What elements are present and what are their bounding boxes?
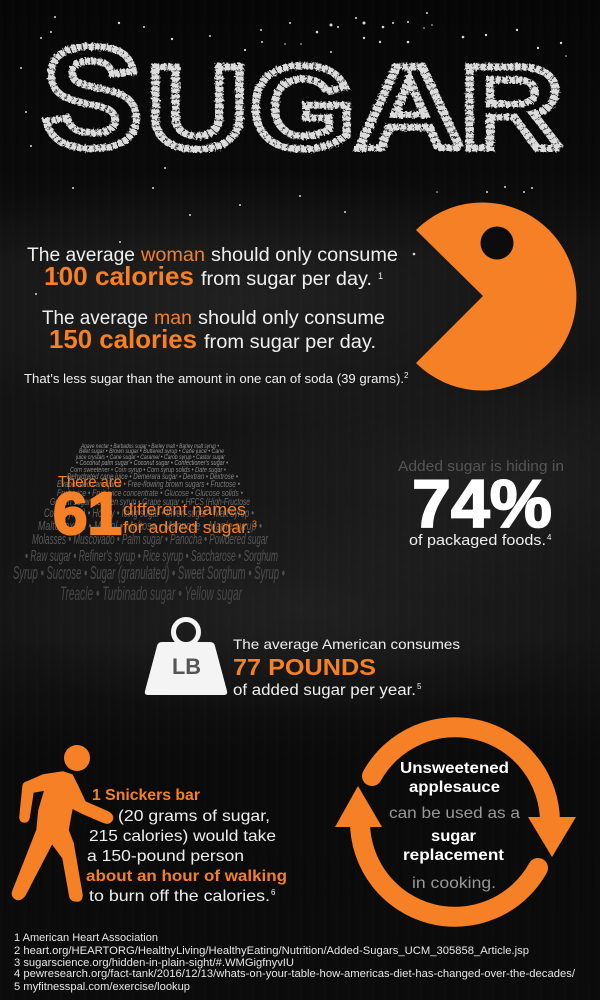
calorie limits text: from sugar per day. [204,332,376,353]
word cloud: names for sugar: Corn sweetener • Corn syrup • Corn syrup solids • Date sugar • [70,465,226,474]
word cloud: names for sugar: Fruit juice • Fruit juice concentrate • Glucose • Glucose solids • [57,488,243,499]
icon: cycle arrows [335,727,576,917]
walking text: 1 Snickers bar [92,787,200,804]
applesauce text: applesauce [409,779,500,796]
icon: LB weight: LB [172,654,201,679]
icon: walking person [12,745,112,901]
title: SUGAR: G [250,42,355,174]
footnotes [14,932,576,993]
word cloud: names for sugar: • Raw sugar • Refiner's syrup • Rice syrup • Saccharose • Sorghum [25,548,278,565]
sugar crystals scattered [20,12,567,295]
stat: 74 percent: of packaged foods. [409,532,546,549]
walking text: (20 grams of sugar, [118,808,270,825]
calorie limits text [24,245,409,386]
walking text: 215 calories) would take [89,828,276,845]
stat: 61 names: for added sugar. [123,518,251,537]
word cloud: names for sugar: Beet sugar • Brown sugar • Buttered syrup • Cane juice • Cane [79,449,225,455]
stat: 74 percent: Added sugar is hiding in [398,458,564,475]
walking text: 6 [271,888,276,897]
calorie limits text: from sugar per day. [201,269,372,290]
walking text: a 150-pound person [87,848,244,865]
stat: 77 pounds: 77 POUNDS [233,654,376,680]
applesauce text: in cooking. [412,875,496,892]
word cloud: names for sugar: Maltodextrin • Maltol • Maltose • Mannose • Maple syrup • [38,518,262,533]
calorie limits text: 100 calories [44,261,194,291]
stat: 77 pounds: The average American consumes [233,636,460,652]
stat: 74 percent: 74% [412,466,552,542]
word cloud: names for sugar: Dehydrated cane juice • Demerara sugar • Dextran • Dextrose • [67,472,238,481]
word cloud: names for sugar: Evaporated cane juice • Free-flowing brown sugars • Fructose • [57,479,240,489]
calorie limits text: woman [140,245,205,266]
applesauce text: can be used as a [389,805,520,822]
word cloud: names for sugar: Molasses • Muscovado • Palm sugar • Panocha • Powdered sugar [32,532,269,548]
calorie limits text: The average [42,308,148,329]
word cloud: names for sugar: Treacle • Turbinado sugar • Yellow sugar [60,584,242,605]
walking text [86,787,287,905]
calorie limits text: should only consume [198,308,385,329]
applesauce text: replacement [403,847,505,864]
stat: 77 pounds: of added sugar per year. [233,682,416,699]
title: SUGAR: R [460,42,563,174]
word cloud: names for sugar [13,444,285,605]
walking text: about an hour of walking [86,868,287,885]
applesauce text: sugar [431,828,476,845]
stat: 74 percent: 4 [547,533,552,542]
title: SUGAR: S [42,17,142,178]
stat: 61 names: There are [58,474,122,491]
footnotes: 4 pewresearch.org/fact-tank/2016/12/13/whats-on-your-table-how-americas-diet-has-changed-over-the-decades/ [14,968,576,980]
stat: 77 pounds [233,636,460,699]
icon: pac-man [416,202,576,390]
footnotes: 1 American Heart Association [14,932,158,944]
stat: 61 names: 61 [53,481,122,547]
title: SUGAR: A [355,42,464,174]
word cloud: names for sugar: Corn Syrup) • Honey • Icing sugar • Invert sugar • Malt syrup • [44,508,254,520]
calorie limits text: 1 [378,271,383,281]
word cloud: names for sugar: Golden sugar • Golden syrup • Grape sugar • HFCS (High-Fructose [50,496,250,508]
footnotes: 5 myfitnesspal.com/exercise/lookup [14,981,190,993]
word cloud: names for sugar: juice crystals • Cane sugar • Caramel • Carob syrup • Castor sugar [75,454,226,461]
calorie limits text: 150 calories [49,324,197,354]
stat: 77 pounds: 5 [417,682,422,691]
footnotes: 2 heart.org/HEARTORG/HealthyLiving/HealthyEating/Nutrition/Added-Sugars_UCM_305858_Article.jsp [14,945,529,957]
stat: 61 names: different names [123,500,246,519]
calorie limits text: That's less sugar than the amount in one can of soda (39 grams). [24,372,404,386]
word cloud: names for sugar: • Coconut palm sugar • Coconut sugar • Confectioner's sugar • [76,460,228,467]
stat: 61 names [53,474,257,547]
calorie limits text: 2 [404,371,409,380]
word cloud: names for sugar: Agave nectar • Barbados sugar • Barley malt • Barley malt syrup • [80,444,219,450]
stat: 74 percent [398,458,564,549]
calorie limits text: The average [27,245,135,266]
footnotes: 3 sugarscience.org/hidden-in-plain-sight/#.WMGigfnyvIU [14,957,294,969]
calorie limits text: should only consume [211,245,398,266]
walking text: to burn off the calories. [89,888,270,905]
word cloud: names for sugar: Syrup • Sucrose • Sugar (granulated) • Sweet Sorghum • Syrup • [13,563,285,583]
icon: LB weight [145,620,227,695]
applesauce text: Unsweetened [400,760,509,777]
stat: 61 names: 3 [252,519,257,529]
title: SUGAR [42,17,563,178]
calorie limits text: man [154,308,192,329]
title: SUGAR: U [147,42,248,174]
applesauce text [389,760,520,892]
